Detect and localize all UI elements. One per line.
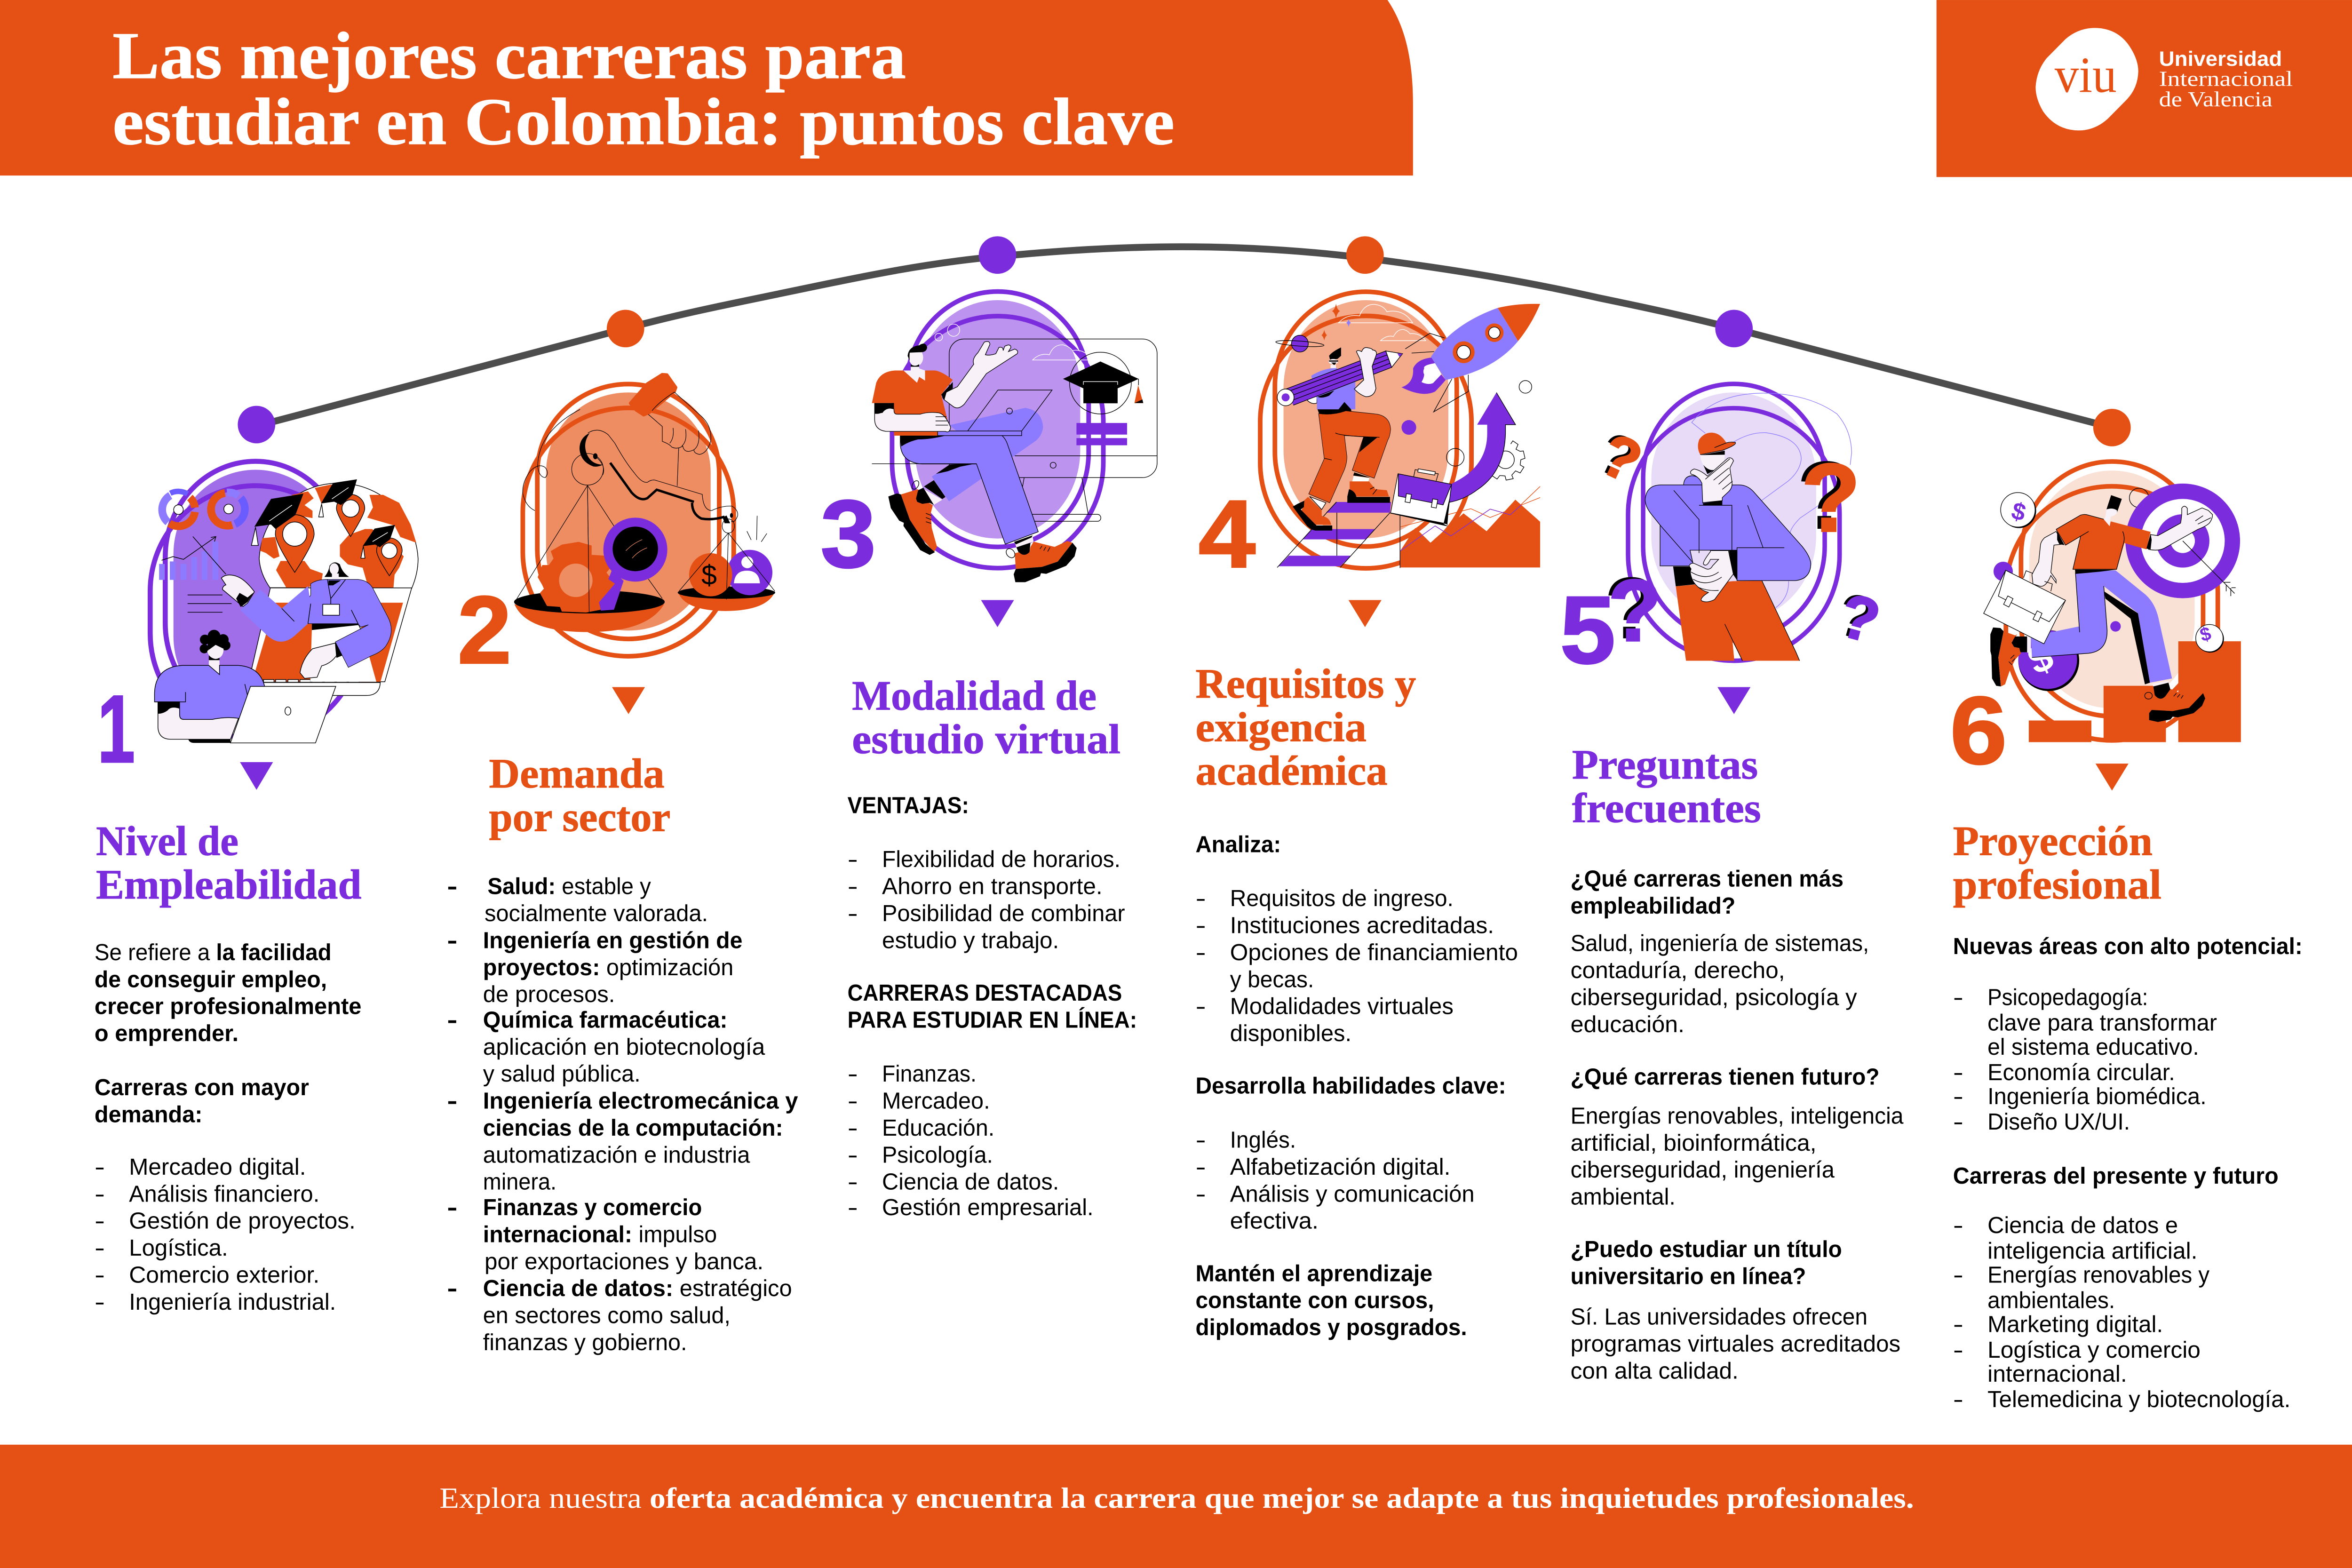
heading 6 [1953, 819, 2162, 909]
online careers list: Gestión empresarial. [882, 1196, 1094, 1221]
definition text [95, 940, 362, 1047]
question 2: Energías renovables, inteligencia [1571, 1104, 1904, 1130]
online careers list: Mercadeo. [882, 1089, 990, 1114]
heading 5: Preguntas [1572, 742, 1758, 789]
sector list: Ingeniería en gestión de [483, 929, 743, 954]
online careers list [848, 981, 1137, 1221]
arrow 1 [240, 762, 273, 790]
new areas list [1953, 935, 2303, 1136]
lifelong learning note: diplomados y posgrados. [1195, 1316, 1467, 1341]
logo mark: viu [2035, 28, 2138, 130]
column 5: Preguntas frecuentes [1571, 742, 1904, 1385]
present and future careers list: internacional. [1987, 1362, 2127, 1388]
present and future careers list: - [1953, 1338, 1963, 1364]
logo wordmark: Internacional [2159, 67, 2293, 91]
key skills list: Alfabetización digital. [1230, 1155, 1451, 1181]
key skills list: - [1195, 1128, 1206, 1154]
heading 4 [1195, 661, 1416, 795]
heading 3: Modalidad de [852, 674, 1097, 720]
sector list: aplicación en biotecnología [483, 1035, 765, 1061]
present and future careers list: Telemedicina y biotecnología. [1987, 1388, 2290, 1413]
present and future careers list: - [1953, 1313, 1963, 1338]
advantages list: - [848, 875, 858, 900]
analyse list: - [1195, 914, 1206, 939]
arrow 2 [612, 687, 645, 714]
heading 4: exigencia [1195, 705, 1367, 752]
heading 3: estudio virtual [852, 717, 1121, 764]
sector list: automatización e industria [483, 1143, 751, 1169]
sector list: proyectos: optimización [483, 955, 733, 981]
sector list: socialmente valorada. [485, 902, 708, 927]
title: estudiar en Colombia: puntos clave [112, 84, 1175, 159]
arrow 4 [1349, 600, 1382, 627]
analyse list: Modalidades virtuales [1230, 995, 1454, 1020]
heading 6: Proyección [1953, 819, 2153, 866]
analyse list: Analiza: [1195, 833, 1281, 858]
question 1: ciberseguridad, psicología y [1571, 986, 1857, 1011]
number 5: 5 [1560, 576, 1615, 684]
heading 1 [96, 819, 362, 909]
new areas list: Nuevas áreas con alto potencial: [1953, 935, 2303, 960]
present and future careers list: Logística y comercio [1987, 1338, 2201, 1364]
question 1: contaduría, derecho, [1571, 959, 1785, 984]
present and future careers list: ambientales. [1987, 1289, 2115, 1314]
heading 2 [489, 752, 670, 842]
number 3: 3 [820, 480, 876, 588]
sector list: minera. [483, 1170, 556, 1196]
arrow 5 [1717, 687, 1750, 714]
illustration 5: frequently asked questions, thinking man with question marks: ? [1608, 562, 1661, 660]
lifelong learning note: constante con cursos, [1195, 1289, 1434, 1314]
illustration 5: frequently asked questions, thinking man with question marks: ? [1833, 580, 1887, 656]
online careers list: - [848, 1062, 858, 1088]
sector list: - [447, 1277, 458, 1302]
key skills list: - [1195, 1155, 1206, 1181]
key skills list: Inglés. [1230, 1128, 1296, 1154]
title: Las mejores carreras para [112, 18, 906, 93]
advantages list: VENTAJAS: [848, 794, 969, 819]
advantages list: - [848, 902, 858, 927]
definition text: de conseguir empleo, [95, 968, 327, 993]
online careers list: - [848, 1196, 858, 1221]
in-demand careers list: Carreras con mayor [95, 1075, 309, 1101]
question 1: ¿Qué carreras tienen más [1571, 867, 1843, 892]
sector list: - [447, 1196, 458, 1221]
question 2 [1571, 1065, 1904, 1210]
online careers list: PARA ESTUDIAR EN LÍNEA: [848, 1007, 1137, 1034]
logo wordmark: Universidad [2159, 47, 2282, 71]
timeline curve with six dots [238, 236, 2131, 446]
online careers list: Finanzas. [882, 1062, 977, 1088]
sector list: por exportaciones y banca. [485, 1250, 763, 1275]
question 2: ciberseguridad, ingeniería [1571, 1158, 1835, 1184]
illustration 5: frequently asked questions, thinking man with question marks: ? [1591, 421, 1652, 496]
illustration 5: frequently asked questions, thinking man with question marks [1588, 384, 1887, 661]
sector list: Salud: estable y [487, 875, 652, 900]
number 4: 4 [1199, 480, 1256, 588]
analyse list [1195, 833, 1518, 1047]
arrow 3 [981, 600, 1014, 627]
new areas list: clave para transformar [1987, 1011, 2217, 1036]
sector list: - [447, 1008, 458, 1034]
number 6: 6 [1950, 677, 2007, 785]
illustration 6: professional projection, man running to target up stairs [1984, 462, 2241, 742]
online careers list: - [848, 1116, 858, 1142]
sector list: Ingeniería electromecánica y [483, 1089, 799, 1114]
question 3: ¿Puedo estudiar un título [1571, 1238, 1842, 1263]
in-demand careers list: Gestión de proyectos. [129, 1209, 356, 1234]
key skills list: efectiva. [1230, 1209, 1319, 1234]
illustration 2: labour demand, balance scale [514, 374, 775, 656]
in-demand careers list: - [95, 1236, 105, 1262]
question 3: programas virtuales acreditados [1571, 1332, 1901, 1358]
advantages list: Flexibilidad de horarios. [882, 848, 1120, 873]
present and future careers list: - [1953, 1263, 1963, 1289]
online careers list: Psicología. [882, 1143, 993, 1169]
question 3: Sí. Las universidades ofrecen [1571, 1305, 1867, 1330]
present and future careers list: - [1953, 1388, 1963, 1413]
illustration 5: frequently asked questions, thinking man with question marks: ? [1797, 441, 1856, 549]
heading 5 [1572, 742, 1761, 833]
sector list: internacional: impulso [483, 1223, 717, 1248]
sector list: finanzas y gobierno. [483, 1330, 687, 1356]
header banner with title [0, 0, 1413, 175]
sector list: - [447, 875, 458, 900]
definition text: crecer profesionalmente [95, 995, 362, 1020]
sector list: - [447, 929, 458, 954]
sector list [447, 875, 799, 1356]
number 1: 1 [97, 675, 135, 783]
question 3: universitario en línea? [1571, 1265, 1806, 1290]
illustration 6: professional projection, man running to target up stairs: $ [2009, 497, 2029, 526]
logo wordmark: de Valencia [2159, 87, 2273, 111]
logo mark: viu: viu [2055, 47, 2117, 103]
present and future careers list: Ciencia de datos e [1987, 1214, 2178, 1239]
new areas list: - [1953, 1110, 1963, 1136]
online careers list: - [848, 1143, 858, 1169]
advantages list: Ahorro en transporte. [882, 875, 1103, 900]
heading 3 [852, 674, 1121, 764]
present and future careers list: Carreras del presente y futuro [1953, 1164, 2279, 1190]
heading 5: frecuentes [1572, 786, 1761, 833]
question 1 [1571, 867, 1869, 1038]
logo panel: Universidad Internacional de Valencia [1937, 0, 2352, 177]
present and future careers list: - [1953, 1214, 1963, 1239]
illustration 3: virtual study, man with laptop and monitor [872, 292, 1157, 582]
in-demand careers list [95, 1075, 356, 1316]
new areas list: Diseño UX/UI. [1987, 1110, 2130, 1136]
in-demand careers list: demanda: [95, 1103, 202, 1128]
analyse list: - [1195, 940, 1206, 966]
key skills list: Análisis y comunicación [1230, 1182, 1475, 1208]
new areas list: el sistema educativo. [1987, 1035, 2199, 1061]
heading 4: Requisitos y [1195, 661, 1416, 708]
arrow 6 [2096, 764, 2129, 791]
online careers list: - [848, 1170, 858, 1196]
analyse list: disponibles. [1230, 1022, 1351, 1047]
footer banner [0, 1445, 2352, 1568]
advantages list: Posibilidad de combinar [882, 902, 1125, 927]
column 4: Requisitos y exigencia académica [1195, 661, 1518, 1341]
heading 4: académica [1195, 748, 1388, 795]
new areas list: - [1953, 1061, 1963, 1086]
illustration 5: frequently asked questions, thinking man with question marks: ? [1588, 419, 1648, 493]
in-demand careers list: - [95, 1155, 105, 1181]
sector list: ciencias de la computación: [483, 1116, 783, 1142]
key skills list: Desarrolla habilidades clave: [1195, 1074, 1506, 1099]
sector list: en sectores como salud, [483, 1304, 731, 1329]
online careers list: Ciencia de datos. [882, 1170, 1059, 1196]
analyse list: Opciones de financiamiento [1230, 940, 1518, 966]
advantages list: estudio y trabajo. [882, 929, 1059, 954]
advantages list [848, 794, 1125, 954]
title [112, 18, 1175, 159]
question 3: con alta calidad. [1571, 1359, 1739, 1385]
in-demand careers list: - [95, 1209, 105, 1234]
sector list: Finanzas y comercio [483, 1196, 702, 1221]
analyse list: Instituciones acreditadas. [1230, 914, 1494, 939]
sector list: de procesos. [483, 983, 615, 1008]
illustration 5: frequently asked questions, thinking man with question marks: ? [1830, 579, 1884, 654]
sector list: Ciencia de datos: estratégico [483, 1277, 792, 1302]
new areas list: Economía circular. [1987, 1061, 2175, 1086]
question 1: Salud, ingeniería de sistemas, [1571, 931, 1869, 957]
lifelong learning note: Mantén el aprendizaje [1195, 1262, 1433, 1287]
illustration 2: labour demand, balance scale: $ [701, 559, 717, 590]
analyse list: - [1195, 995, 1206, 1020]
column 2: Demanda por sector [447, 752, 799, 1356]
sector list: - [447, 1089, 458, 1114]
lifelong learning note [1195, 1262, 1467, 1341]
key skills list [1195, 1074, 1506, 1234]
analyse list: y becas. [1230, 968, 1314, 993]
in-demand careers list: Análisis financiero. [129, 1182, 319, 1208]
footer call to action: Explora nuestra oferta académica y encuentra la carrera que mejor se adapte a tus inquietudes profesionales. [439, 1484, 1914, 1515]
heading 2: por sector [489, 795, 670, 842]
number 2: 2 [458, 576, 511, 684]
illustration 6: professional projection, man running to target up stairs: $ [2198, 623, 2213, 646]
present and future careers list [1953, 1164, 2290, 1413]
illustration 1: employability, teacher with world map and student at laptop [150, 462, 418, 743]
new areas list: - [1953, 986, 1963, 1011]
new areas list: Ingeniería biomédica. [1987, 1085, 2207, 1110]
advantages list: - [848, 848, 858, 873]
heading 2: Demanda [489, 752, 665, 798]
in-demand careers list: Ingeniería industrial. [129, 1290, 336, 1316]
analyse list: - [1195, 887, 1206, 912]
illustration 5: frequently asked questions, thinking man with question marks: ? [1801, 444, 1860, 552]
in-demand careers list: - [95, 1263, 105, 1289]
present and future careers list: Marketing digital. [1987, 1313, 2163, 1338]
column 1: Nivel de Empleabilidad [95, 819, 362, 1316]
question 2: artificial, bioinformática, [1571, 1131, 1817, 1157]
in-demand careers list: Comercio exterior. [129, 1263, 319, 1289]
illustration 6: professional projection, man running to target up stairs: $ [2021, 633, 2060, 683]
heading 1: Nivel de [96, 819, 238, 866]
illustration 4: academic requirements, man with pencil, rocket and steps [1260, 292, 1540, 568]
in-demand careers list: Mercadeo digital. [129, 1155, 306, 1181]
new areas list: Psicopedagogía: [1987, 986, 2148, 1011]
question 3 [1571, 1238, 1901, 1385]
heading 1: Empleabilidad [96, 863, 362, 909]
question 2: ¿Qué carreras tienen futuro? [1571, 1065, 1880, 1090]
present and future careers list: Energías renovables y [1987, 1263, 2210, 1289]
question 1: educación. [1571, 1012, 1685, 1038]
definition text: Se refiere a la facilidad [95, 940, 332, 966]
present and future careers list: inteligencia artificial. [1987, 1239, 2198, 1265]
online careers list: Educación. [882, 1116, 994, 1142]
in-demand careers list: - [95, 1182, 105, 1208]
new areas list: - [1953, 1085, 1963, 1110]
in-demand careers list: - [95, 1290, 105, 1316]
in-demand careers list: Logística. [129, 1236, 228, 1262]
sector list: Química farmacéutica: [483, 1008, 728, 1034]
column 6: Proyección profesional [1953, 819, 2303, 1413]
key skills list: - [1195, 1182, 1206, 1208]
question 2: ambiental. [1571, 1185, 1676, 1210]
definition text: o emprender. [95, 1022, 238, 1047]
column 3: Modalidad de estudio virtual [848, 674, 1137, 1221]
question 1: empleabilidad? [1571, 894, 1735, 920]
online careers list: CARRERAS DESTACADAS [848, 981, 1122, 1007]
logo wordmark [2159, 47, 2293, 111]
sector list: y salud pública. [483, 1062, 641, 1088]
analyse list: Requisitos de ingreso. [1230, 887, 1454, 912]
online careers list: - [848, 1089, 858, 1114]
heading 6: profesional [1953, 863, 2162, 909]
illustration 5: frequently asked questions, thinking man with question marks: ? [1605, 559, 1658, 657]
